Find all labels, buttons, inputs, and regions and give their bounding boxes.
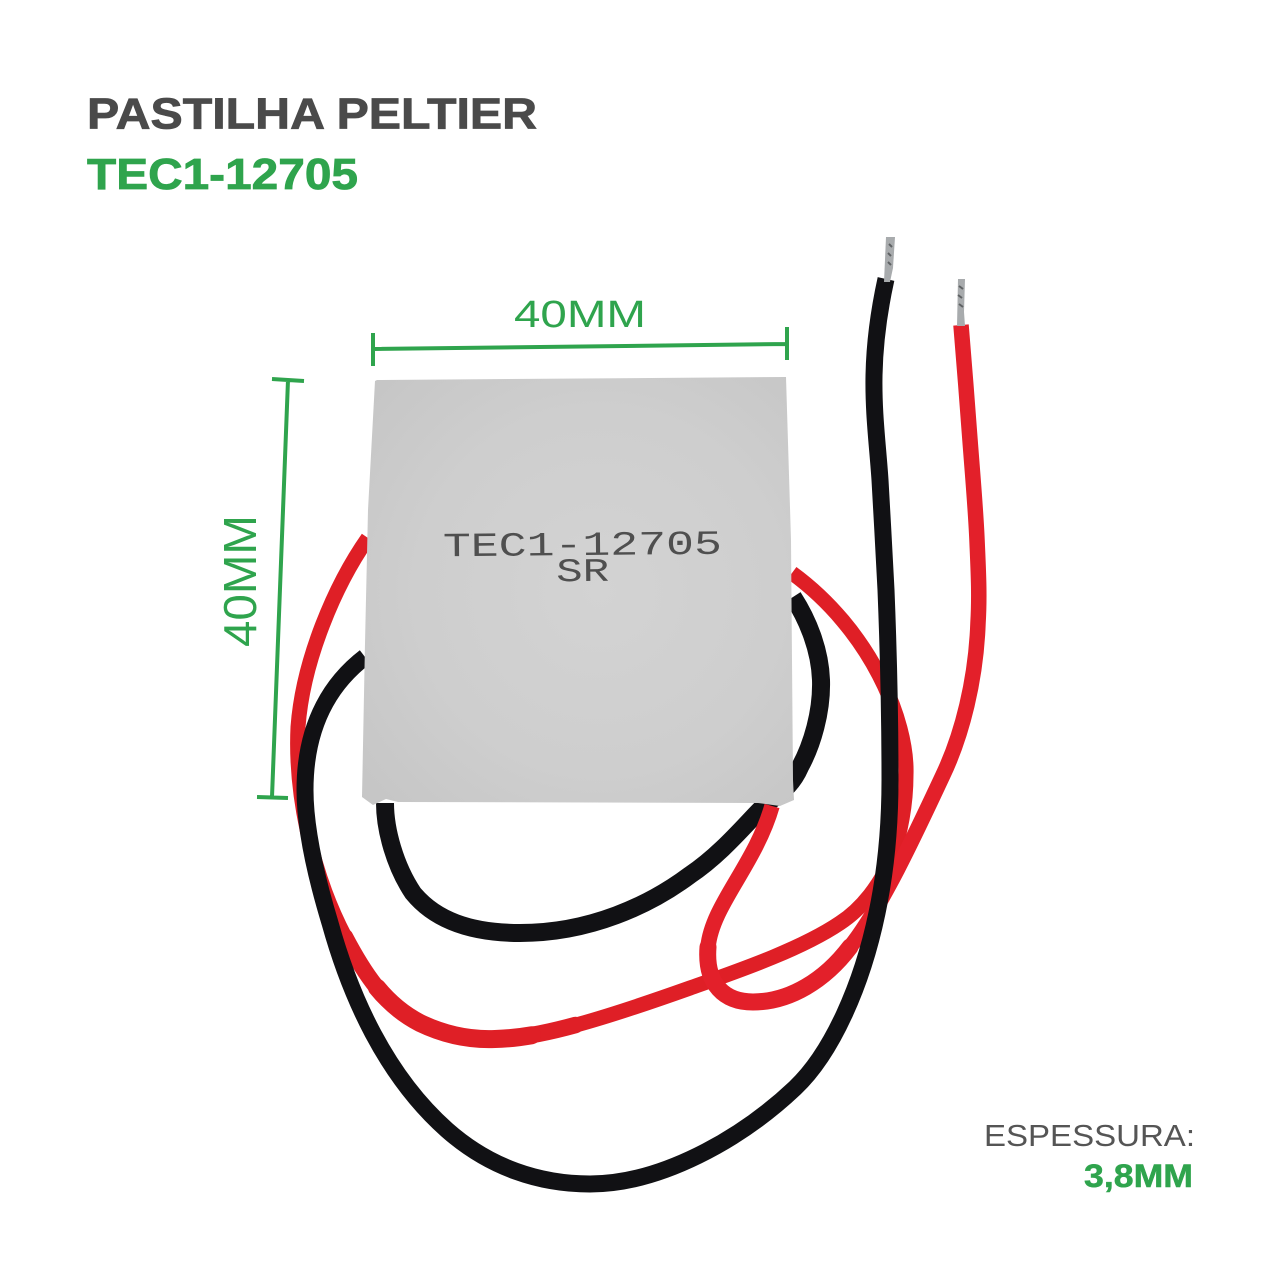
thickness heading: ESPESSURA:: [984, 1118, 1195, 1153]
wire terminal: red lead: [957, 279, 965, 326]
printed series: SR: [556, 554, 609, 591]
wire: long black: [305, 279, 890, 1184]
title line: model: TEC1-12705: [87, 150, 358, 199]
dimension: width 40mm: [373, 294, 787, 366]
wire: long red: [298, 538, 906, 1039]
wire terminal: black lead: [884, 237, 895, 282]
height arrow: [257, 379, 304, 798]
title: [87, 90, 537, 199]
thickness value: 3,8MM: [1084, 1158, 1193, 1194]
printed model: TEC1-12705: [443, 527, 722, 567]
peltier plate: [362, 377, 794, 806]
title line: product type: PASTILHA PELTIER: [87, 90, 537, 138]
width arrow: [373, 327, 787, 366]
dimension: height 40mm: [214, 379, 304, 798]
wire: red lead with loop: [708, 325, 979, 1002]
plate printed label: [443, 527, 722, 592]
plate body: [362, 377, 794, 806]
width label: 40MM: [514, 294, 646, 336]
height label: 40MM: [214, 515, 266, 647]
thickness note: [984, 1118, 1195, 1194]
wire: short black loop: [385, 597, 821, 933]
